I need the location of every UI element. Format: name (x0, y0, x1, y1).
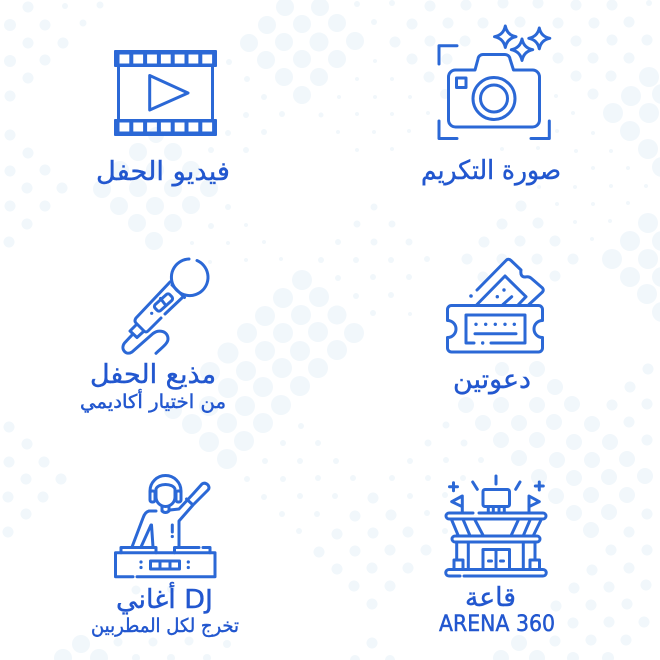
icon: microphone (123, 259, 208, 353)
icon: film strip with play button (114, 50, 217, 136)
heading: honor photo: صورة التكريم (421, 156, 561, 186)
heading: invitations: دعوتين (453, 365, 531, 395)
icon: arena venue (446, 476, 546, 576)
subheading: DJ note: تخرج لكل المطربين (91, 615, 239, 637)
icon: invitation tickets (448, 259, 543, 352)
icon: DJ at decks (116, 475, 215, 577)
heading: host: مذيع الحفل (90, 360, 216, 390)
subheading: host note: من اختيار أكاديمي (80, 389, 226, 413)
heading: video: فيديو الحفل (96, 157, 230, 187)
heading: DJ songs: DJ أغاني (116, 581, 213, 615)
icon: camera with sparkles (439, 26, 550, 138)
subheading: Arena 360: ARENA 360 (439, 612, 555, 637)
heading: hall: قاعة (465, 583, 516, 613)
